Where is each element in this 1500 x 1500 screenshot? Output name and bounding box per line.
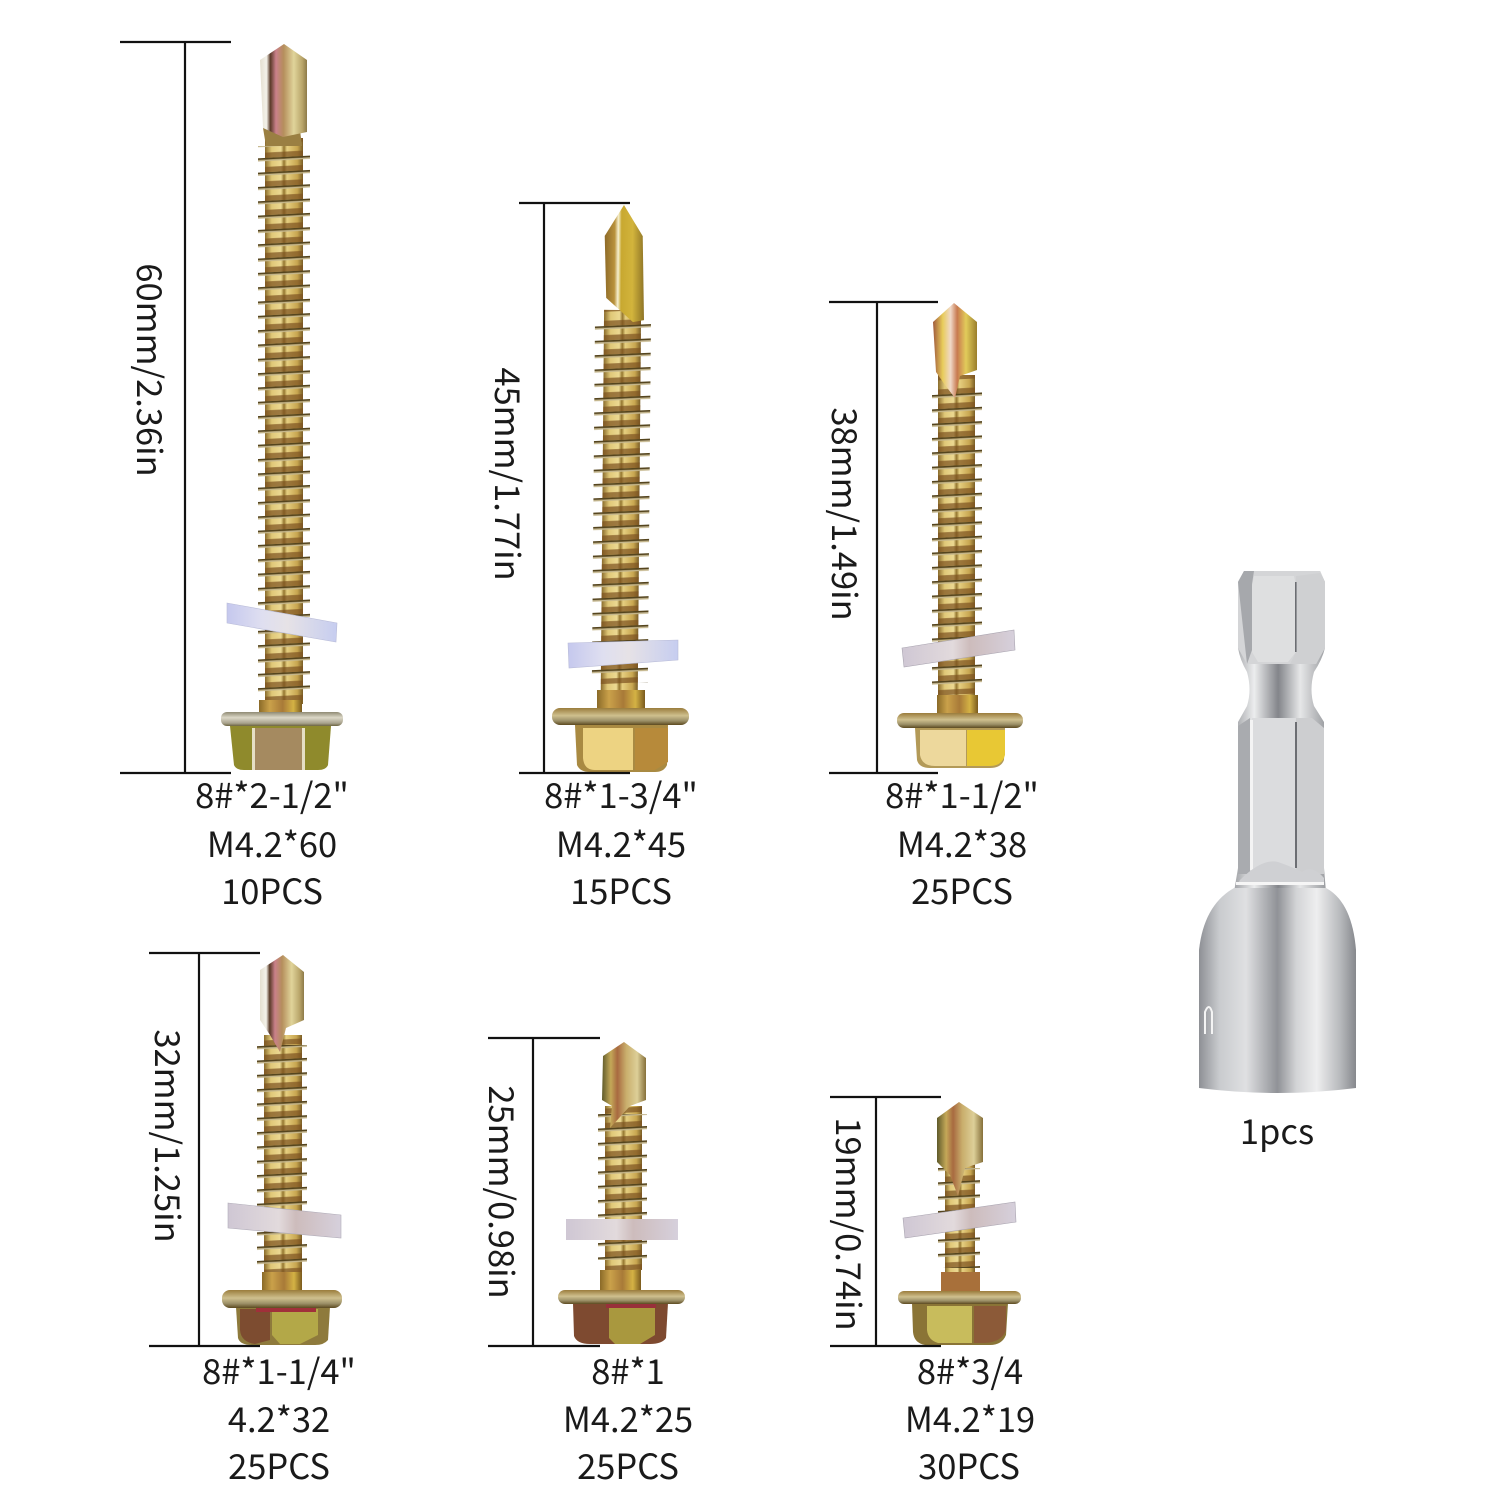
dimension label: 60mm: 60mm/2.36in: [127, 263, 177, 477]
size label: 60mm: 8#*2-1/2": [195, 768, 349, 818]
screw image: 19mm: [898, 1102, 1021, 1345]
dimension label: 45mm: 45mm/1.77in: [485, 367, 535, 581]
screw group: 32mm: [145, 953, 356, 1489]
size label: 38mm: 8#*1-1/2": [885, 768, 1039, 818]
screw group: 25mm: [479, 1038, 693, 1489]
size label: 25mm: M4.2*25: [563, 1392, 693, 1442]
size label: 19mm: M4.2*19: [905, 1392, 1035, 1442]
size label: 45mm: [544, 768, 698, 914]
size label: 45mm: 15PCS: [570, 864, 672, 914]
socket marking: [1205, 1007, 1212, 1034]
screw group: 19mm: [826, 1097, 1035, 1489]
size label: 25mm: [563, 1344, 693, 1489]
dimension label: 32mm: 32mm/1.25in: [145, 1029, 195, 1243]
dimension bracket: 19mm: [830, 1097, 941, 1346]
size label: 38mm: M4.2*38: [897, 817, 1027, 867]
size label: 60mm: [195, 768, 349, 914]
dimension label: 25mm: 25mm/0.98in: [479, 1085, 529, 1299]
nut driver group: [1199, 571, 1356, 1154]
size label: 38mm: [885, 768, 1039, 914]
size label: 25mm: 25PCS: [577, 1439, 679, 1489]
size label: 45mm: 8#*1-3/4": [544, 768, 698, 818]
dimension bracket: 32mm: [149, 953, 260, 1346]
size label: 32mm: 25PCS: [228, 1439, 330, 1489]
screw image: 45mm: [552, 205, 689, 772]
nut driver image: [1199, 571, 1356, 1093]
screw image: 38mm: [897, 303, 1023, 768]
dimension bracket: 25mm: [488, 1038, 600, 1346]
size label: 19mm: 30PCS: [918, 1439, 1020, 1489]
size label: 60mm: 10PCS: [221, 864, 323, 914]
size label: 19mm: [905, 1344, 1035, 1489]
size label: 19mm: 8#*3/4: [917, 1344, 1023, 1394]
dimension label: 38mm: 38mm/1.49in: [822, 407, 872, 621]
size label: 60mm: M4.2*60: [207, 817, 337, 867]
size label: 32mm: [202, 1344, 356, 1489]
screw group: 45mm: [485, 203, 698, 914]
size label: 25mm: 8#*1: [591, 1344, 665, 1394]
screw image: 60mm: [221, 44, 343, 770]
dimension bracket: 60mm: [120, 42, 231, 773]
size label: 38mm: 25PCS: [911, 864, 1013, 914]
screw image: 32mm: [222, 955, 342, 1345]
quantity label: driver: 1pcs: [1240, 1104, 1314, 1154]
size label: 45mm: M4.2*45: [556, 817, 686, 867]
screw group: 38mm: [822, 302, 1039, 914]
size label: 32mm: 4.2*32: [228, 1392, 330, 1442]
dimension label: 19mm: 19mm/0.74in: [826, 1117, 876, 1331]
screw group: 60mm: [120, 42, 349, 914]
dimension bracket: 45mm: [519, 203, 630, 773]
dimension bracket: 38mm: [829, 302, 938, 773]
screw image: 25mm: [558, 1042, 685, 1344]
size label: 32mm: 8#*1-1/4": [202, 1344, 356, 1394]
